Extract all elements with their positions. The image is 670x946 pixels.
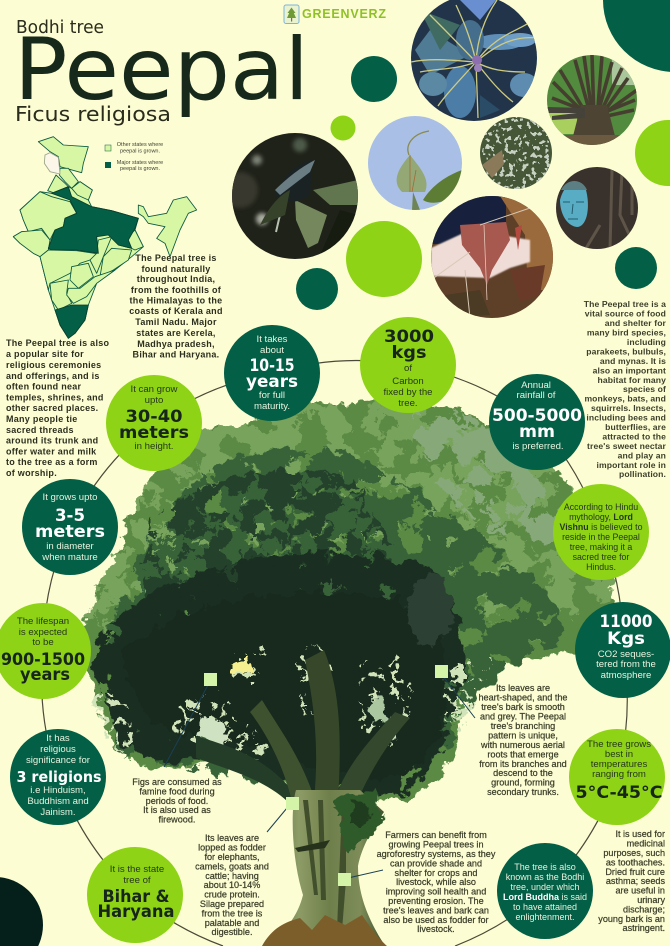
text: fodder: Silage prepared — [200, 899, 264, 909]
text: agroforestry: livestock, while also — [396, 877, 476, 887]
circle: 3-5 meters: in diameter — [46, 541, 95, 552]
subtitle: Ficus religiosa: Ficus religiosa — [15, 102, 171, 126]
text: habitat: tree's sweet nectar — [587, 441, 667, 451]
text: religious site: temples, shrines, and — [6, 392, 104, 402]
circle: temperature: 5°C-45°C — [576, 783, 662, 803]
dark upper clumps — [140, 471, 400, 620]
circle: Lord Vishnu: mythology, Lord — [569, 512, 633, 522]
text: medicinal uses: are useful in — [615, 886, 665, 896]
text: medicinal uses: Dried fruit cure — [605, 867, 665, 877]
text: fodder: digestible. — [212, 927, 252, 937]
circle: 3000 kgs carbon: kgs — [392, 343, 426, 363]
text: agroforestry: also be used as fodder for — [383, 915, 489, 925]
text: religious site: religious ceremonies — [6, 360, 101, 370]
circle: Bihar and Haryana: Haryana — [98, 902, 174, 922]
text: agroforestry: preventing erosion. The — [388, 896, 484, 906]
text: habitat: parakeets, bulbuls, — [586, 346, 666, 356]
circle: rainfall: mm — [519, 422, 555, 442]
circle: 30-40 meters: meters — [119, 423, 189, 443]
photo: Buddha head in tree roots — [556, 167, 638, 250]
circle: lifespan: is expected — [19, 627, 67, 638]
text: agroforestry: shelter for crops and — [395, 868, 477, 878]
circle: 3000 kgs carbon: of — [404, 363, 412, 374]
circle: Bihar and Haryana: tree of — [123, 875, 151, 886]
text: habitat: important role in — [596, 460, 666, 470]
text: leaves and branching: descend to the — [493, 768, 553, 778]
text: medicinal uses: urinary — [637, 895, 665, 905]
circle: rainfall — [489, 374, 585, 470]
photo: young leaf against blue sky — [368, 116, 462, 210]
circle: temperature: The tree grows — [587, 739, 651, 750]
circle: 3-5 meters: 3-5 — [55, 506, 85, 526]
circle: 11000 Kgs CO2: atmosphere — [601, 670, 651, 681]
text: agroforestry: agroforestry systems, as they — [377, 849, 496, 859]
text: religious site: Many people tie — [6, 414, 78, 424]
circle: 11000 Kgs CO2: 11000 — [600, 612, 653, 632]
text: figs: firewood. — [159, 814, 195, 824]
pale grey-green patches upper right — [410, 407, 590, 546]
foliage on trunk — [338, 790, 385, 850]
tree illustration — [84, 401, 614, 946]
circle: 3-5 meters: meters — [35, 522, 105, 542]
circle: temperature: best in — [605, 749, 633, 760]
text: medicinal uses: astringent. — [623, 923, 665, 933]
circle: rainfall: Annual — [521, 380, 551, 391]
text: habitat: habitat for many — [598, 375, 666, 385]
circle: 10-15 years: for full — [259, 390, 285, 401]
circle: 3 religions — [10, 729, 106, 825]
legend: Other states where — [117, 142, 163, 148]
text: natural range: Bihar and Haryana. — [133, 350, 219, 360]
text: medicinal uses: It is used for — [615, 829, 665, 839]
circle: Lord Buddha — [497, 843, 593, 939]
text: habitat: vital source of food — [585, 308, 666, 318]
circle: 3-5 meters — [22, 479, 118, 575]
circle: Lord Vishnu: Vishnu is believed to — [560, 522, 642, 532]
circle: 3 religions: Buddhism and — [27, 796, 89, 807]
circle: 30-40 meters: It can grow — [131, 384, 178, 395]
text: religious site: The Peepal tree is also — [6, 338, 109, 348]
major states — [48, 187, 138, 338]
text: habitat: including bees and — [586, 412, 666, 422]
text: habitat: and shelter for — [605, 318, 667, 328]
legend — [105, 142, 163, 172]
text: medicinal uses: medicinal — [627, 838, 665, 848]
text: medicinal uses: young bark is an — [598, 914, 665, 924]
circle: Lord Vishnu — [553, 484, 649, 580]
logo: GreenVerz: GREENVERZ — [302, 7, 386, 21]
circle: 11000 Kgs CO2: CO2 seques- — [598, 649, 654, 660]
circle: lifespan: 900-1500 — [1, 650, 85, 670]
circle: temperature — [569, 729, 665, 825]
title: Peepal: Peepal — [14, 20, 309, 120]
text: habitat: butterflies, are — [605, 422, 666, 432]
circle: 3000 kgs carbon: tree. — [398, 398, 418, 409]
text: natural range: throughout India, — [137, 274, 215, 284]
logo: GreenVerz — [284, 5, 386, 24]
circle: 3-5 meters: It grows upto — [43, 492, 97, 503]
text: figs: It is also used as — [143, 805, 211, 815]
text: fodder: about 10-14% — [204, 880, 260, 890]
circle: Bihar and Haryana: Bihar & — [102, 887, 170, 907]
text: natural range: coasts of Kerala and — [129, 306, 223, 316]
text: agroforestry: can provide shade and — [390, 858, 482, 868]
canopy foliage — [84, 401, 614, 800]
circle: Lord Vishnu: tree, making it a — [570, 542, 632, 552]
text: medicinal uses: discharge; — [623, 904, 665, 914]
circle: 10-15 years: years — [246, 372, 298, 392]
trunk — [262, 790, 385, 946]
text: agroforestry: livestock. — [417, 924, 455, 934]
text: fodder: from the tree is — [202, 908, 263, 918]
text: fodder: for elephants, — [204, 852, 260, 862]
text: agroforestry: growing Peepal trees in — [388, 840, 484, 850]
circle: 3000 kgs carbon — [360, 317, 456, 413]
text: leaves and branching: secondary trunks. — [487, 787, 559, 797]
circle: rainfall: rainfall of — [517, 390, 556, 401]
circle: 11000 Kgs CO2: tered from the — [596, 659, 656, 670]
Jammu region outline (white) — [44, 153, 60, 174]
text: fodder: camels, goats and — [195, 862, 269, 872]
text: religious site: around its trunk and — [6, 436, 98, 446]
text: religious site: and offerings, and is — [6, 371, 100, 381]
legend: peepal is grown. — [120, 166, 160, 172]
photo: red leaf — [431, 196, 553, 318]
text: natural range: states are Kerela, — [136, 328, 216, 338]
circle: 3 religions: i.e Hinduism, — [30, 785, 86, 796]
text: religious site: to the tree as a form — [6, 457, 98, 467]
circle: 30-40 meters — [106, 375, 202, 471]
circle: 10-15 years: maturity. — [254, 401, 290, 412]
text: leaves and branching: pattern is unique, — [488, 730, 558, 740]
circle: 11000 Kgs CO2: Kgs — [607, 629, 645, 649]
text: leaves and branching: Its leaves are — [496, 683, 550, 693]
mainland base — [13, 182, 143, 338]
circle: Lord Buddha: The tree is also — [514, 862, 576, 872]
other states — [13, 137, 197, 310]
dark transition band — [96, 553, 464, 795]
circle: rainfall: is preferred. — [512, 441, 564, 452]
legend: peepal is grown. — [120, 148, 160, 154]
text: leaves and branching: heart-shaped, and the — [479, 692, 567, 702]
photo: blue leaves with radiating veins — [411, 0, 538, 121]
trunk streaks — [295, 800, 346, 930]
circle: Lord Buddha: Lord Buddha is said — [503, 892, 587, 902]
text: agroforestry: Farmers can benefit from — [385, 830, 487, 840]
circle: Lord Buddha: to have attained — [513, 902, 577, 912]
circle: 3 religions: It has — [46, 733, 70, 744]
circle: 3000 kgs carbon: fixed by the — [383, 387, 433, 398]
text: leaves and branching: ground, forming — [491, 778, 555, 788]
text: fodder: palatable and — [205, 918, 259, 928]
text: habitat: The Peepal tree is a — [584, 299, 666, 309]
text: leaves and branching: with numerous aerial — [480, 740, 565, 750]
map of India — [13, 137, 197, 338]
text: figs: periods of food. — [146, 796, 208, 806]
circle: Lord Vishnu: Hindus. — [586, 562, 616, 572]
photo: canopy from below — [480, 117, 552, 189]
light foliage patches — [85, 401, 614, 640]
photo: dark peepal leaves — [222, 133, 358, 259]
text: habitat: pollination. — [619, 469, 666, 479]
circle: 3000 kgs carbon: 3000 — [384, 327, 434, 347]
text: leaves and branching: roots that emerge — [487, 750, 559, 760]
text: habitat: and play an — [618, 450, 666, 460]
text: leaves and branching: and grey. The Peepal — [480, 712, 566, 722]
circle: Bihar and Haryana: It is the state — [110, 864, 164, 875]
text: natural range: the Himalayas to the — [130, 296, 222, 306]
text: fodder: crude protein. — [204, 890, 260, 900]
circle: 3 religions: significance for — [26, 755, 91, 766]
text: agroforestry: improving soil health and — [386, 886, 486, 896]
circle: Lord Vishnu: According to Hindu — [564, 502, 638, 512]
text: figs: famine food during — [139, 786, 215, 796]
text: natural range: found naturally — [141, 264, 211, 274]
circle: lifespan: The lifespan — [17, 616, 69, 627]
text: habitat: also an important — [593, 366, 666, 376]
text: medicinal uses: asthma; seeds — [606, 876, 665, 886]
title block — [14, 17, 309, 126]
circle: Lord Buddha: tree, under which — [510, 882, 580, 892]
text: fodder: Its leaves are — [205, 833, 259, 843]
trunk base roots — [262, 915, 387, 946]
text: fodder: lopped as fodder — [198, 842, 266, 852]
branches and limbs — [196, 650, 410, 805]
text: medicinal uses: as toothaches. — [606, 858, 665, 868]
text: religious site: sacred threads — [6, 425, 74, 435]
circle: 30-40 meters: upto — [145, 395, 163, 406]
photo: banyan trunk with aerial roots — [547, 55, 637, 147]
text: habitat: many bird species, — [587, 328, 666, 338]
circle: temperature: temperatures — [591, 759, 647, 770]
circle: Lord Buddha: enlightenment. — [515, 912, 575, 922]
callout markers and leader lines — [164, 665, 475, 886]
circle: Lord Vishnu: reside in the Peepal — [562, 532, 640, 542]
circle: lifespan: years — [20, 665, 70, 685]
text: religious site: often found near — [6, 382, 82, 392]
circle: 30-40 meters: in height. — [135, 441, 173, 452]
circle: 3 religions: 3 religions — [16, 768, 102, 786]
text: habitat: including — [627, 337, 666, 347]
text: natural range: The Peepal tree is — [135, 253, 217, 263]
text: leaves and branching: from its branches and — [479, 759, 567, 769]
subtitle: Bodhi tree: Bodhi tree — [16, 17, 104, 38]
circle: 3 religions: Jainism. — [40, 807, 76, 818]
circle: rainfall: 500-5000 — [492, 406, 582, 426]
text: habitat: attracted to the — [602, 432, 666, 442]
circle: Lord Vishnu: sacred tree for — [573, 552, 629, 562]
text: religious site: other sacred places. — [6, 403, 98, 413]
text: religious site: a popular site for — [6, 349, 84, 359]
legend: Major states where — [117, 160, 163, 166]
text: figs: Figs are consumed as — [132, 777, 222, 787]
text: religious site: of worship. — [6, 468, 57, 478]
text: habitat: squirrels. Insects, — [591, 403, 666, 413]
pale gaps in lower canopy — [90, 645, 495, 765]
text: natural range: Madhya pradesh, — [137, 339, 215, 349]
circle: 3-5 meters: when mature — [41, 552, 98, 563]
text: leaves and branching: tree's branching — [491, 721, 555, 731]
circle: 3 religions: religious — [40, 744, 76, 755]
circle: 10-15 years — [224, 325, 320, 421]
text: natural range: Tamil Nadu. Major — [135, 317, 217, 327]
circle: lifespan — [0, 603, 91, 699]
text: leaves and branching: tree's bark is smooth — [481, 702, 565, 712]
text: fodder: cattle; having — [205, 871, 259, 881]
circle: Lord Buddha: known as the Bodhi — [506, 872, 584, 882]
dark centre core — [125, 594, 445, 780]
circle: 11000 Kgs CO2 — [575, 602, 670, 698]
circle: 3000 kgs carbon: Carbon — [392, 376, 424, 387]
text: habitat: monkeys, bats, and — [584, 394, 666, 404]
text: agroforestry: tree's leaves and bark can — [383, 906, 489, 916]
circle: 10-15 years: It takes — [257, 334, 288, 345]
text: natural range: from the foothills of — [131, 285, 222, 295]
text: medicinal uses: purposes, such — [603, 848, 665, 858]
circle: 30-40 meters: 30-40 — [126, 407, 183, 427]
circle: 10-15 years: about — [260, 345, 284, 356]
connecting ring — [42, 361, 627, 946]
circle: temperature: ranging from — [592, 769, 646, 780]
text: religious site: offer water and milk — [6, 446, 97, 456]
circle: Bihar and Haryana — [87, 847, 183, 943]
circle: 10-15 years: 10-15 — [250, 356, 294, 376]
mid-tone foliage — [105, 449, 562, 790]
text: habitat: species of — [623, 384, 666, 394]
text: habitat: and mynas. It is — [600, 356, 666, 366]
circle: lifespan: to be — [32, 637, 54, 648]
